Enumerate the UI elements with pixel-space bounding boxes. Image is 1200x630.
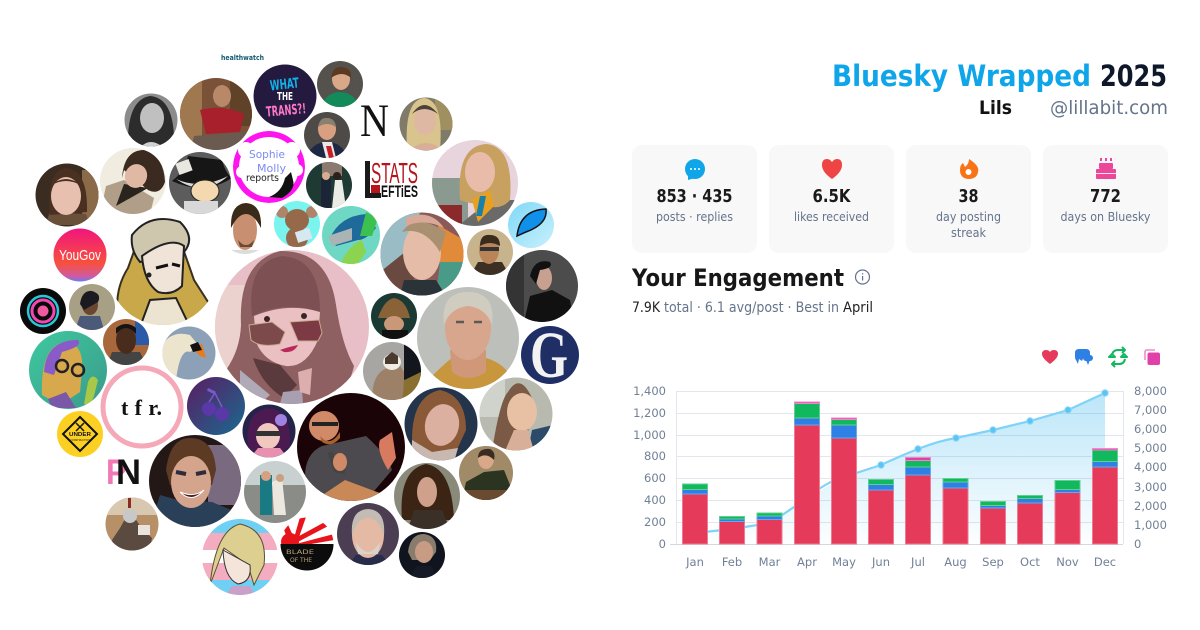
avatar: healthwatch logo: healthwatch bbox=[221, 54, 264, 62]
avatar: What the Trans podcast: WHAT bbox=[269, 75, 300, 94]
left axis labels: 600 bbox=[644, 471, 666, 485]
logo: Stats for Lefties: EFTiES bbox=[381, 182, 418, 201]
avatar: What the Trans podcast: THE bbox=[277, 90, 293, 103]
avatar bubble cluster bbox=[20, 54, 579, 596]
avatar: Blade of the red sun: BLADE bbox=[286, 549, 314, 556]
avatar: PN logo: P bbox=[106, 453, 127, 492]
avatar: Blade of the red sun bbox=[280, 517, 334, 572]
header: title: 2025 bbox=[1100, 59, 1167, 93]
avatar: man in hat bbox=[371, 293, 417, 340]
logo: Stats for Lefties bbox=[365, 158, 418, 201]
avatar: woman with rainbow flag bbox=[380, 212, 464, 296]
avatar: man cutout bbox=[230, 203, 262, 254]
month labels: Jan bbox=[685, 555, 704, 569]
avatar: mouse cartoon bbox=[274, 201, 320, 249]
month labels: Oct bbox=[1020, 555, 1040, 569]
avatar: Sophie Molly reports: reports bbox=[246, 173, 279, 184]
panel: posts and replies bbox=[632, 145, 757, 253]
avatar: woman with curly hair bbox=[394, 463, 460, 529]
panel: days on Bluesky bbox=[1043, 145, 1168, 253]
bars: reposts bbox=[682, 404, 1118, 519]
month labels: Dec bbox=[1094, 555, 1116, 569]
cumulative area and line bbox=[695, 390, 1108, 544]
bars: likes bbox=[682, 425, 1118, 544]
avatar: woman with auburn hair bbox=[404, 387, 478, 462]
avatar: bald man with microphone bbox=[297, 393, 405, 502]
avatar: What the Trans podcast: TRANS?! bbox=[265, 101, 307, 121]
avatar: dragon bbox=[322, 206, 380, 264]
icon: speech bubble bbox=[685, 159, 705, 180]
chart legend bbox=[1042, 347, 1160, 367]
avatar: woman in red dress bbox=[180, 78, 252, 150]
avatar: Blade of the red sun: OF THE bbox=[290, 557, 312, 564]
avatar: The Guardian G: G bbox=[530, 319, 568, 392]
right axis labels: 5,000 bbox=[1134, 441, 1167, 455]
engagement summary: April bbox=[843, 300, 873, 316]
left axis labels: 1,400 bbox=[633, 384, 666, 398]
avatar: butterfly bbox=[508, 202, 554, 248]
month labels: Apr bbox=[797, 555, 817, 569]
right axis labels: 6,000 bbox=[1134, 422, 1167, 436]
right axis labels: 7,000 bbox=[1134, 403, 1167, 417]
left axis labels bbox=[633, 384, 666, 551]
avatar: wedding couple bbox=[306, 162, 352, 208]
stacked bars bbox=[682, 402, 1118, 544]
avatar: couple in a lavender field bbox=[244, 461, 306, 523]
chart: monthly engagement stacked bars with cumulative line bbox=[633, 384, 1167, 569]
month labels: Feb bbox=[722, 555, 742, 569]
avatar: older man with white beard bbox=[337, 503, 399, 565]
avatar: smiling woman in denim bbox=[479, 377, 553, 451]
avatar: cartoon woman with headscarf bbox=[116, 218, 208, 325]
avatar: black and white woman bbox=[124, 94, 178, 146]
avatar: t f r.: t f r. bbox=[121, 395, 162, 420]
avatar: cherries bbox=[187, 377, 245, 435]
avatar: cartoon goblin bbox=[105, 497, 159, 551]
right axis labels: 3,000 bbox=[1134, 480, 1167, 494]
panel: days on Bluesky: days on Bluesky bbox=[1060, 209, 1151, 224]
right axis labels: 8,000 bbox=[1134, 384, 1167, 398]
header: title: Bluesky Wrapped bbox=[832, 59, 1091, 93]
avatar: older man in yellow shirt bbox=[417, 287, 519, 390]
icon: info bbox=[856, 270, 870, 284]
avatar: under construction sign bbox=[57, 411, 103, 457]
panel: posts and replies: 853 · 435 bbox=[656, 186, 732, 207]
month labels bbox=[685, 555, 1116, 569]
month labels: Sep bbox=[982, 555, 1004, 569]
icon: flame bbox=[960, 159, 978, 179]
panel: likes received: likes received bbox=[794, 209, 869, 224]
avatar: press cartoon bbox=[169, 152, 232, 215]
avatar: woman with glasses and blond hair bbox=[432, 140, 518, 228]
avatar: smiling woman with face paint bbox=[149, 435, 241, 527]
avatar: under construction sign: UNDER bbox=[69, 432, 91, 438]
avatar: purple-haired elf with dragon bbox=[29, 331, 107, 409]
right axis labels: 0 bbox=[1134, 537, 1141, 551]
right axis labels: 2,000 bbox=[1134, 499, 1167, 513]
avatar: woman in green jacket bbox=[316, 60, 364, 108]
avatar: black man bbox=[103, 319, 149, 365]
avatar: Sophie Molly reports: Sophie bbox=[249, 148, 285, 161]
avatar: blonde woman bbox=[400, 98, 452, 150]
icon: cake bbox=[1096, 158, 1116, 179]
engagement summary: total · 6.1 avg/post · Best in bbox=[664, 300, 839, 316]
avatar: PN logo: N bbox=[116, 453, 141, 492]
engagement summary: 7.9K bbox=[632, 300, 661, 316]
avatar: Sophie Molly reports: Molly bbox=[257, 162, 286, 175]
left axis labels: 400 bbox=[644, 493, 666, 507]
avatar: fist logo bbox=[20, 288, 66, 334]
avatar: woman with brown hair bbox=[35, 163, 100, 227]
month labels: Aug bbox=[944, 555, 967, 569]
header: display name and handle: Lils bbox=[979, 97, 1012, 119]
logo: N: N bbox=[360, 95, 389, 147]
month labels: Jun bbox=[871, 555, 890, 569]
avatar: older woman in black bbox=[399, 532, 445, 578]
panel: day posting streak: day posting bbox=[936, 209, 1001, 224]
bars: quotes bbox=[794, 402, 1118, 460]
right axis labels: 4,000 bbox=[1134, 460, 1167, 474]
avatar: blond anime character on trans flag bbox=[202, 519, 278, 596]
heading: Your Engagement: Your Engagement bbox=[631, 264, 844, 292]
avatar: main photo of woman with sunglasses bbox=[215, 250, 369, 404]
avatar: under construction sign: CONSTRUCTION bbox=[70, 438, 90, 442]
panel: posts and replies: posts · replies bbox=[656, 209, 733, 224]
chart grid bbox=[670, 391, 1124, 544]
avatar: purple-haired cartoon woman bbox=[242, 404, 296, 458]
avatar: What the Trans podcast bbox=[252, 64, 318, 128]
left axis labels: 200 bbox=[644, 515, 666, 529]
panel: day posting streak bbox=[906, 145, 1031, 253]
avatar: YouGov: YouGov bbox=[59, 247, 101, 264]
left axis labels: 1,200 bbox=[633, 406, 666, 420]
month labels: Mar bbox=[759, 555, 781, 569]
panel: day posting streak: 38 bbox=[958, 186, 978, 207]
panel: days on Bluesky: 772 bbox=[1090, 186, 1121, 207]
left axis labels: 0 bbox=[659, 537, 666, 551]
icon: reposts legend bbox=[1109, 347, 1127, 367]
avatar: man in red tie bbox=[304, 112, 350, 158]
right axis labels: 1,000 bbox=[1134, 518, 1167, 532]
header: display name and handle bbox=[979, 97, 1168, 119]
avatar: child in a field bbox=[69, 284, 115, 330]
panel: likes received bbox=[769, 145, 894, 253]
avatar: t f r. bbox=[103, 368, 181, 446]
icon: quotes legend bbox=[1145, 350, 1160, 365]
icon: heart bbox=[822, 159, 842, 179]
avatar: cat bbox=[363, 342, 421, 400]
month labels: Jul bbox=[910, 555, 925, 569]
header: display name and handle: @lillabit.com bbox=[1050, 97, 1168, 119]
left axis labels: 800 bbox=[644, 449, 666, 463]
avatar: person in dark jacket bbox=[506, 250, 578, 322]
icon: replies legend bbox=[1075, 349, 1093, 365]
avatar: YouGov bbox=[54, 228, 106, 282]
avatar: man with glasses bbox=[466, 228, 514, 276]
month labels: Nov bbox=[1056, 555, 1079, 569]
left axis labels: 1,000 bbox=[633, 428, 666, 442]
icon: likes legend bbox=[1042, 350, 1058, 364]
avatar: woman with dark hair bbox=[100, 148, 166, 214]
panel: likes received: 6.5K bbox=[812, 186, 851, 207]
logo: Stats for Lefties: STATS bbox=[371, 158, 418, 190]
avatar: Sophie Molly reports bbox=[233, 131, 305, 203]
month labels: May bbox=[832, 555, 856, 569]
panel: day posting streak: streak bbox=[951, 225, 987, 240]
avatar: swan bbox=[162, 326, 216, 380]
avatar: person at table with microphone bbox=[459, 446, 514, 502]
bars: replies bbox=[682, 418, 1118, 522]
right axis labels bbox=[1134, 384, 1167, 551]
